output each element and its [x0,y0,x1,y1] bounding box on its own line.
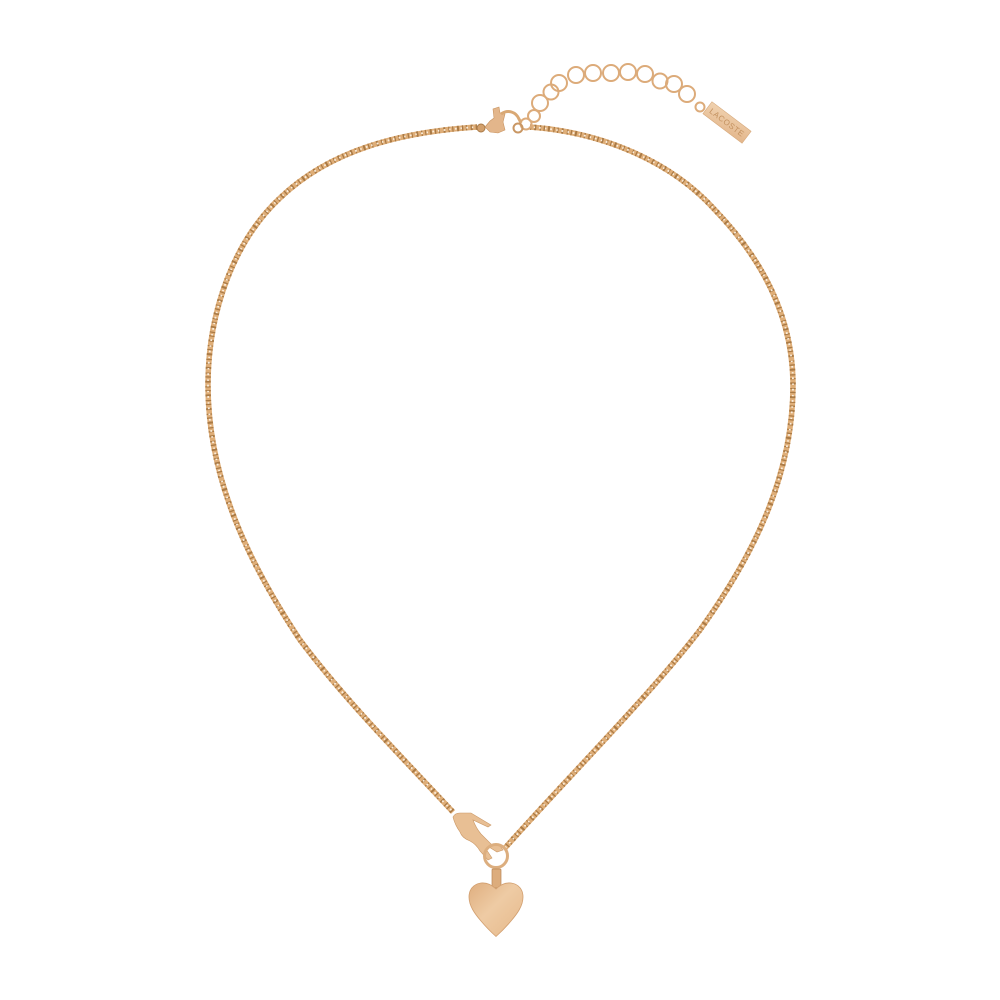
heart pendant [469,883,523,936]
pendant bail [492,869,501,888]
tag text: LACOSTE [708,107,746,139]
lobster clasp [477,107,522,133]
chain: left strand [208,127,477,812]
crocodile charm [453,813,503,860]
extension chain rings [520,64,704,130]
chain: right strand [505,127,793,848]
brand tag [703,102,751,143]
pendant ring [484,844,508,868]
